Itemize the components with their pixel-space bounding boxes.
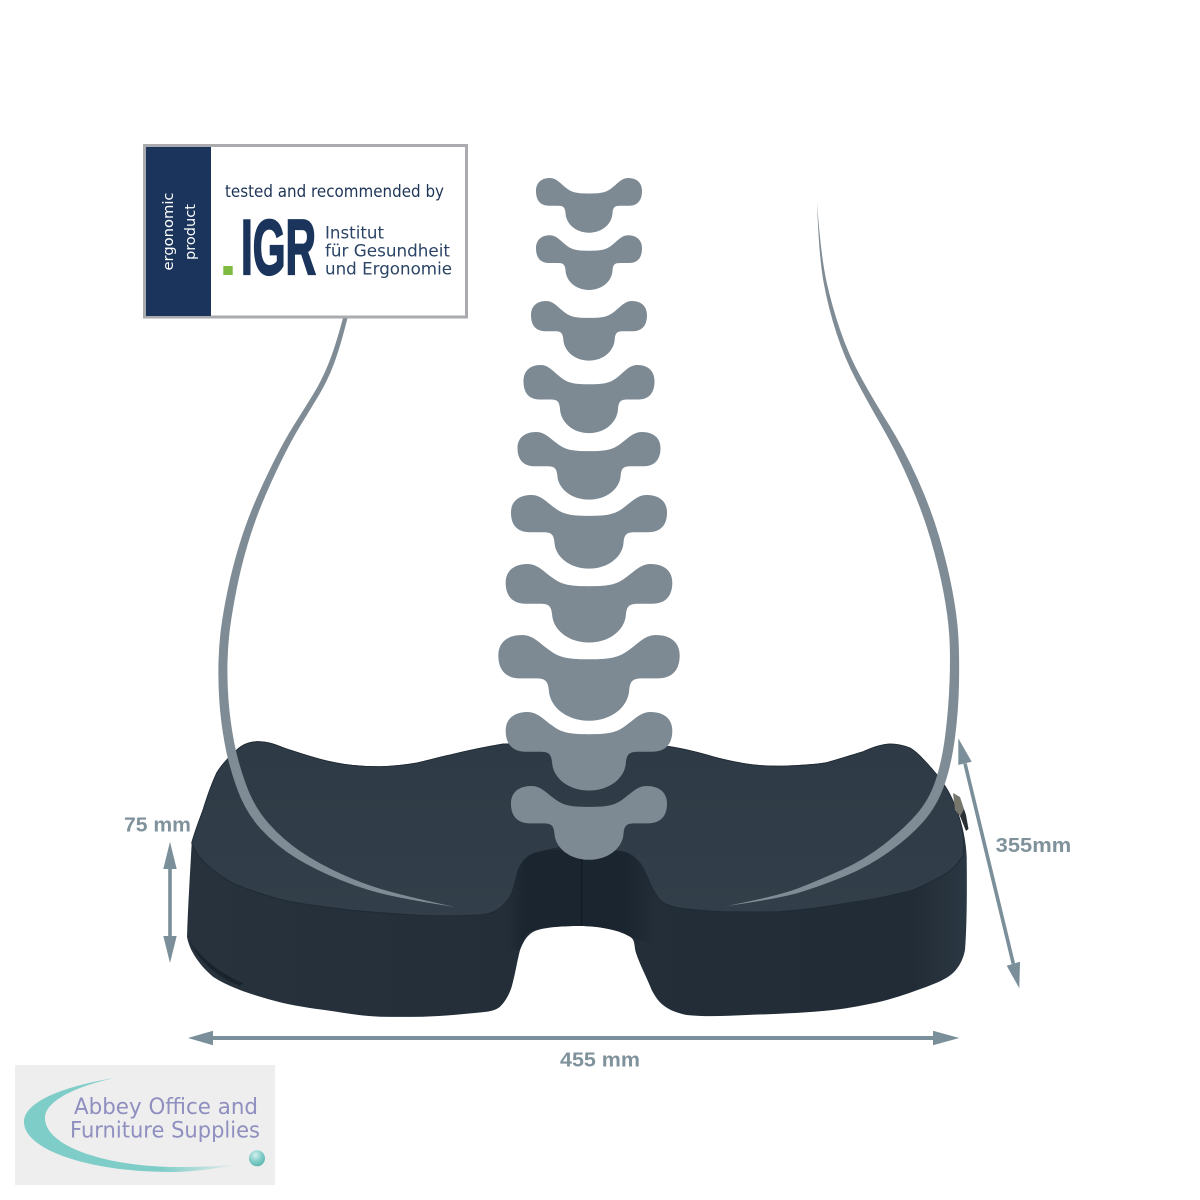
IGR logo: [223, 203, 316, 291]
depth dimension arrow: [958, 738, 1020, 988]
cushion body side: [187, 740, 967, 1017]
vertical label: ergonomic: [161, 192, 177, 270]
seat cushion: [187, 740, 968, 1017]
certification badge: [144, 146, 466, 317]
height label: 75 mm: [124, 814, 191, 837]
navy side panel: [146, 147, 211, 316]
body outline left: [218, 318, 455, 907]
IGR logo: IGR: [241, 203, 316, 291]
centre recess: [505, 850, 655, 950]
height dimension arrow: [163, 842, 177, 963]
vertical label: [161, 192, 199, 270]
tested and recommended heading: tested and recommended by: [225, 182, 444, 201]
logo text: Abbey Office and: [74, 1095, 258, 1120]
logo background: [15, 1065, 275, 1185]
logo text: [70, 1095, 260, 1144]
width label: 455 mm: [560, 1049, 640, 1072]
label tag: [953, 793, 968, 831]
badge frame: [144, 146, 466, 317]
institute name: Institut: [325, 224, 384, 244]
bottom-left pocket: [187, 937, 243, 986]
supplier logo: [15, 1065, 275, 1185]
cushion top surface: [192, 740, 964, 916]
institute name: für Gesundheit: [325, 242, 450, 262]
institute name: und Ergonomie: [325, 259, 452, 279]
logo ball: [249, 1150, 265, 1166]
centre seam: [581, 852, 582, 926]
depth label: 355mm: [996, 834, 1071, 857]
fabric texture: [192, 740, 964, 916]
logo swoosh: [24, 1078, 240, 1172]
body outline right: [727, 203, 959, 906]
institute name: [325, 224, 452, 279]
logo text: Furniture Supplies: [70, 1119, 260, 1144]
spine vertebrae: [498, 178, 680, 860]
width dimension arrow: [188, 1031, 959, 1045]
vertical label: product: [183, 203, 199, 260]
